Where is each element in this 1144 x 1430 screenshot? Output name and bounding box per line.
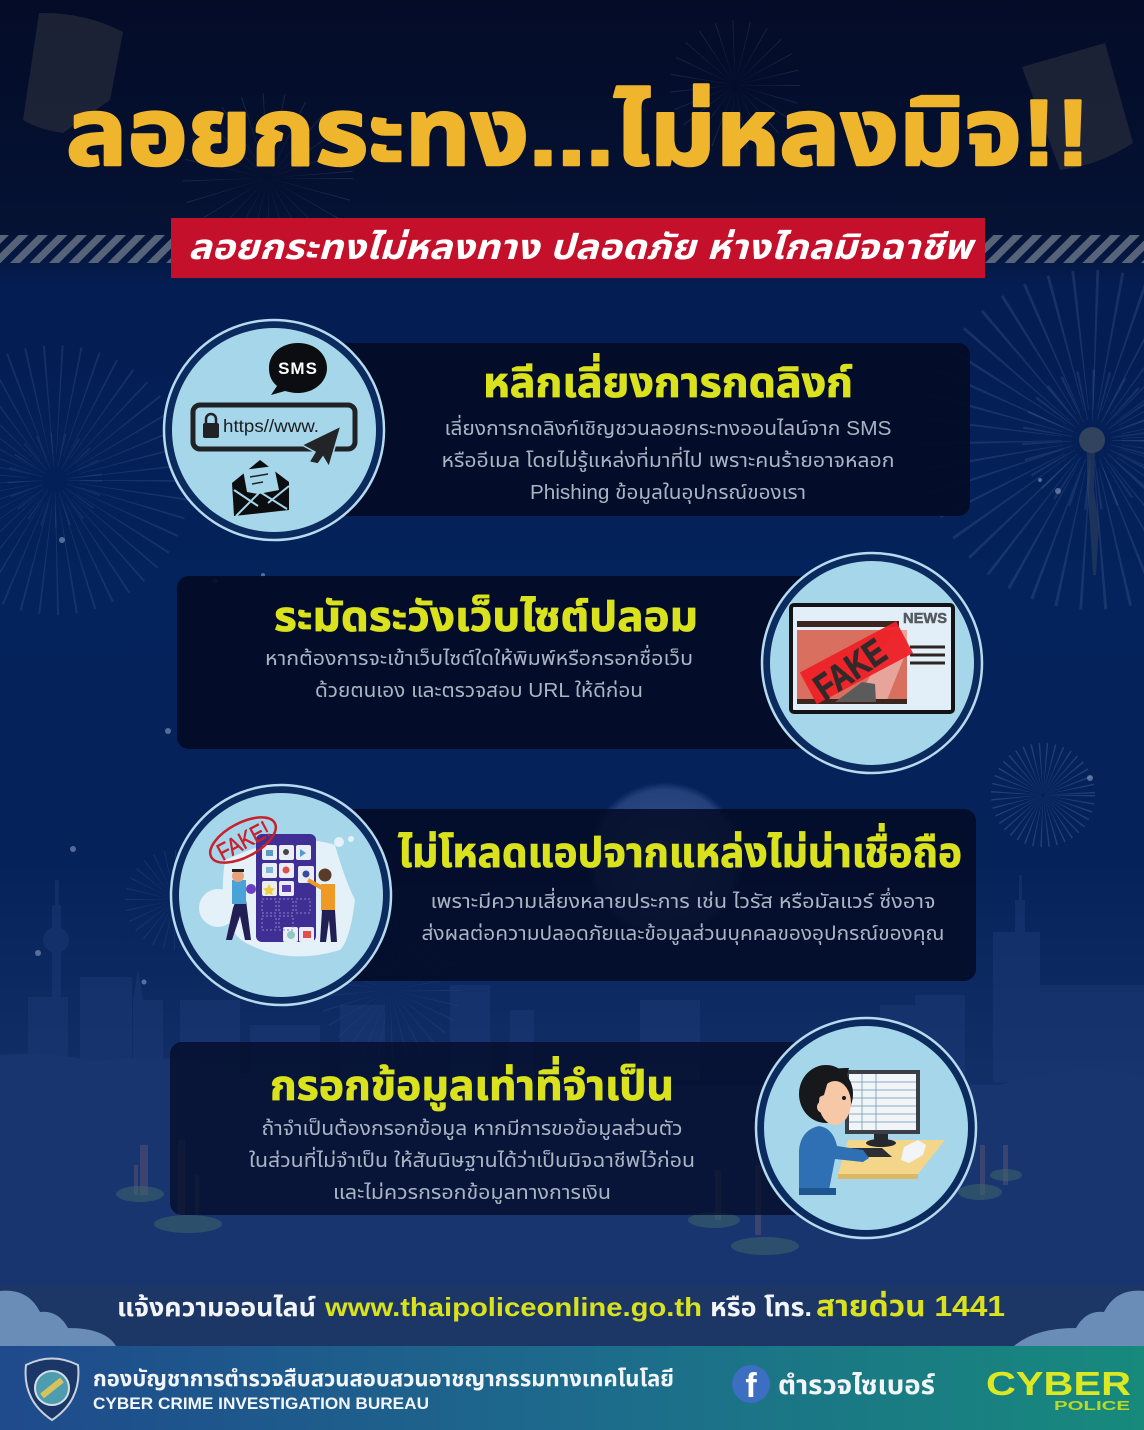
contact line: แจ้งความออนไลน์	[117, 1292, 316, 1322]
icon: facebook	[732, 1365, 770, 1405]
body text: fake websites: หากต้องการจะเข้าเว็บไซต์ใดให้พิมพ์หรือกรอกชื่อเว็บ	[265, 644, 693, 670]
icon: fake news circle	[762, 553, 982, 773]
contact line	[117, 1291, 1005, 1323]
contact line: www.thaipoliceonline.go.th	[324, 1292, 702, 1322]
body text: fake websites	[265, 644, 693, 702]
cyber police logo: POLICE	[1054, 1398, 1130, 1413]
body text: unsafe apps	[422, 887, 944, 946]
body text: avoid links: Phishing ข้อมูลในอุปกรณ์ของเรา	[530, 481, 806, 505]
right figure	[321, 884, 335, 911]
body text: unsafe apps: เพราะมีความเสี่ยงหลายประการ เช่น ไวรัส หรือมัลแวร์ ซึ่งอาจ	[430, 887, 936, 913]
fake stamp: FAKE!	[213, 816, 275, 866]
body text: only necessary info: และไม่ควรกรอกข้อมูลทางการเงิน	[333, 1181, 611, 1205]
icon: fake news circle: NEWS	[903, 610, 947, 627]
icon: sms link email circle: https//www.	[223, 416, 319, 436]
heading: fake websites: ระมัดระวังเว็บไซต์ปลอม	[274, 593, 698, 640]
icon: sms link email circle	[164, 320, 384, 540]
body text: only necessary info	[249, 1117, 695, 1205]
heading: unsafe apps: ไม่โหลดแอปจากแหล่งไม่น่าเชื่อถือ	[398, 823, 962, 876]
heading: only necessary info: กรอกข้อมูลเท่าที่จำเป็น	[270, 1056, 674, 1111]
lantern right	[1022, 43, 1133, 170]
icon: police badge	[26, 1358, 78, 1420]
cyber police logo	[986, 1365, 1131, 1413]
footer bar	[0, 1346, 1144, 1430]
subtitle banner	[171, 218, 985, 278]
body text: avoid links	[442, 414, 894, 505]
facebook name: ตำรวจไซเบอร์	[778, 1370, 935, 1400]
heading: avoid links: หลีกเลี่ยงการกดลิงก์	[483, 353, 853, 406]
body text: unsafe apps: ส่งผลต่อความปลอดภัยและข้อมูลส่วนบุคคลของอุปกรณ์ของคุณ	[422, 922, 944, 946]
body text: avoid links: เลี่ยงการกดลิงก์เชิญชวนลอยกระทงออนไลน์จาก SMS	[444, 414, 892, 440]
panel: only necessary info	[170, 1042, 810, 1215]
panel: unsafe apps	[340, 809, 976, 981]
body text: only necessary info: ในส่วนที่ไม่จำเป็น ให้สันนิษฐานได้ว่าเป็นมิจฉาชีพไว้ก่อน	[249, 1146, 695, 1172]
lantern left	[23, 13, 123, 133]
agency name: กองบัญชาการตำรวจสืบสวนสอบสวนอาชญากรรมทางเทคโนโลยี	[93, 1366, 674, 1391]
icon: person at computer circle	[756, 1018, 976, 1238]
panel: fake websites	[177, 576, 817, 749]
icon: fake news circle: FAKE	[806, 630, 894, 708]
body text: fake websites: ด้วยตนเอง และตรวจสอบ URL ให้ดีก่อน	[315, 679, 643, 702]
cloud right	[1014, 1291, 1144, 1346]
icon: sms link email circle: SMS	[278, 359, 318, 378]
body text: only necessary info: ถ้าจำเป็นต้องกรอกข้อมูล หากมีการขอข้อมูลส่วนตัว	[262, 1117, 682, 1141]
stripe band	[0, 235, 1144, 263]
icon: fake app circle	[171, 785, 391, 1005]
left figure	[226, 900, 251, 940]
title: ลอยกระทง...ไม่หลงมิจ!!	[66, 80, 1090, 185]
cloud left	[0, 1291, 116, 1346]
cyber police logo: CYBER	[986, 1365, 1131, 1402]
agency name	[93, 1366, 674, 1413]
body text: avoid links: หรืออีเมล โดยไม่รู้แหล่งที่มาที่ไป เพราะคนร้ายอาจหลอก	[442, 446, 894, 473]
contact line: หรือ โทร.	[710, 1292, 812, 1322]
agency name: CYBER CRIME INVESTIGATION BUREAU	[93, 1394, 429, 1413]
subtitle banner: ลอยกระทงไม่หลงทาง ปลอดภัย ห่างไกลมิจฉาชีพ	[188, 228, 977, 267]
icon: facebook: f	[745, 1367, 757, 1405]
contact line: สายด่วน 1441	[816, 1291, 1005, 1323]
panel: avoid clicking links	[330, 343, 970, 516]
